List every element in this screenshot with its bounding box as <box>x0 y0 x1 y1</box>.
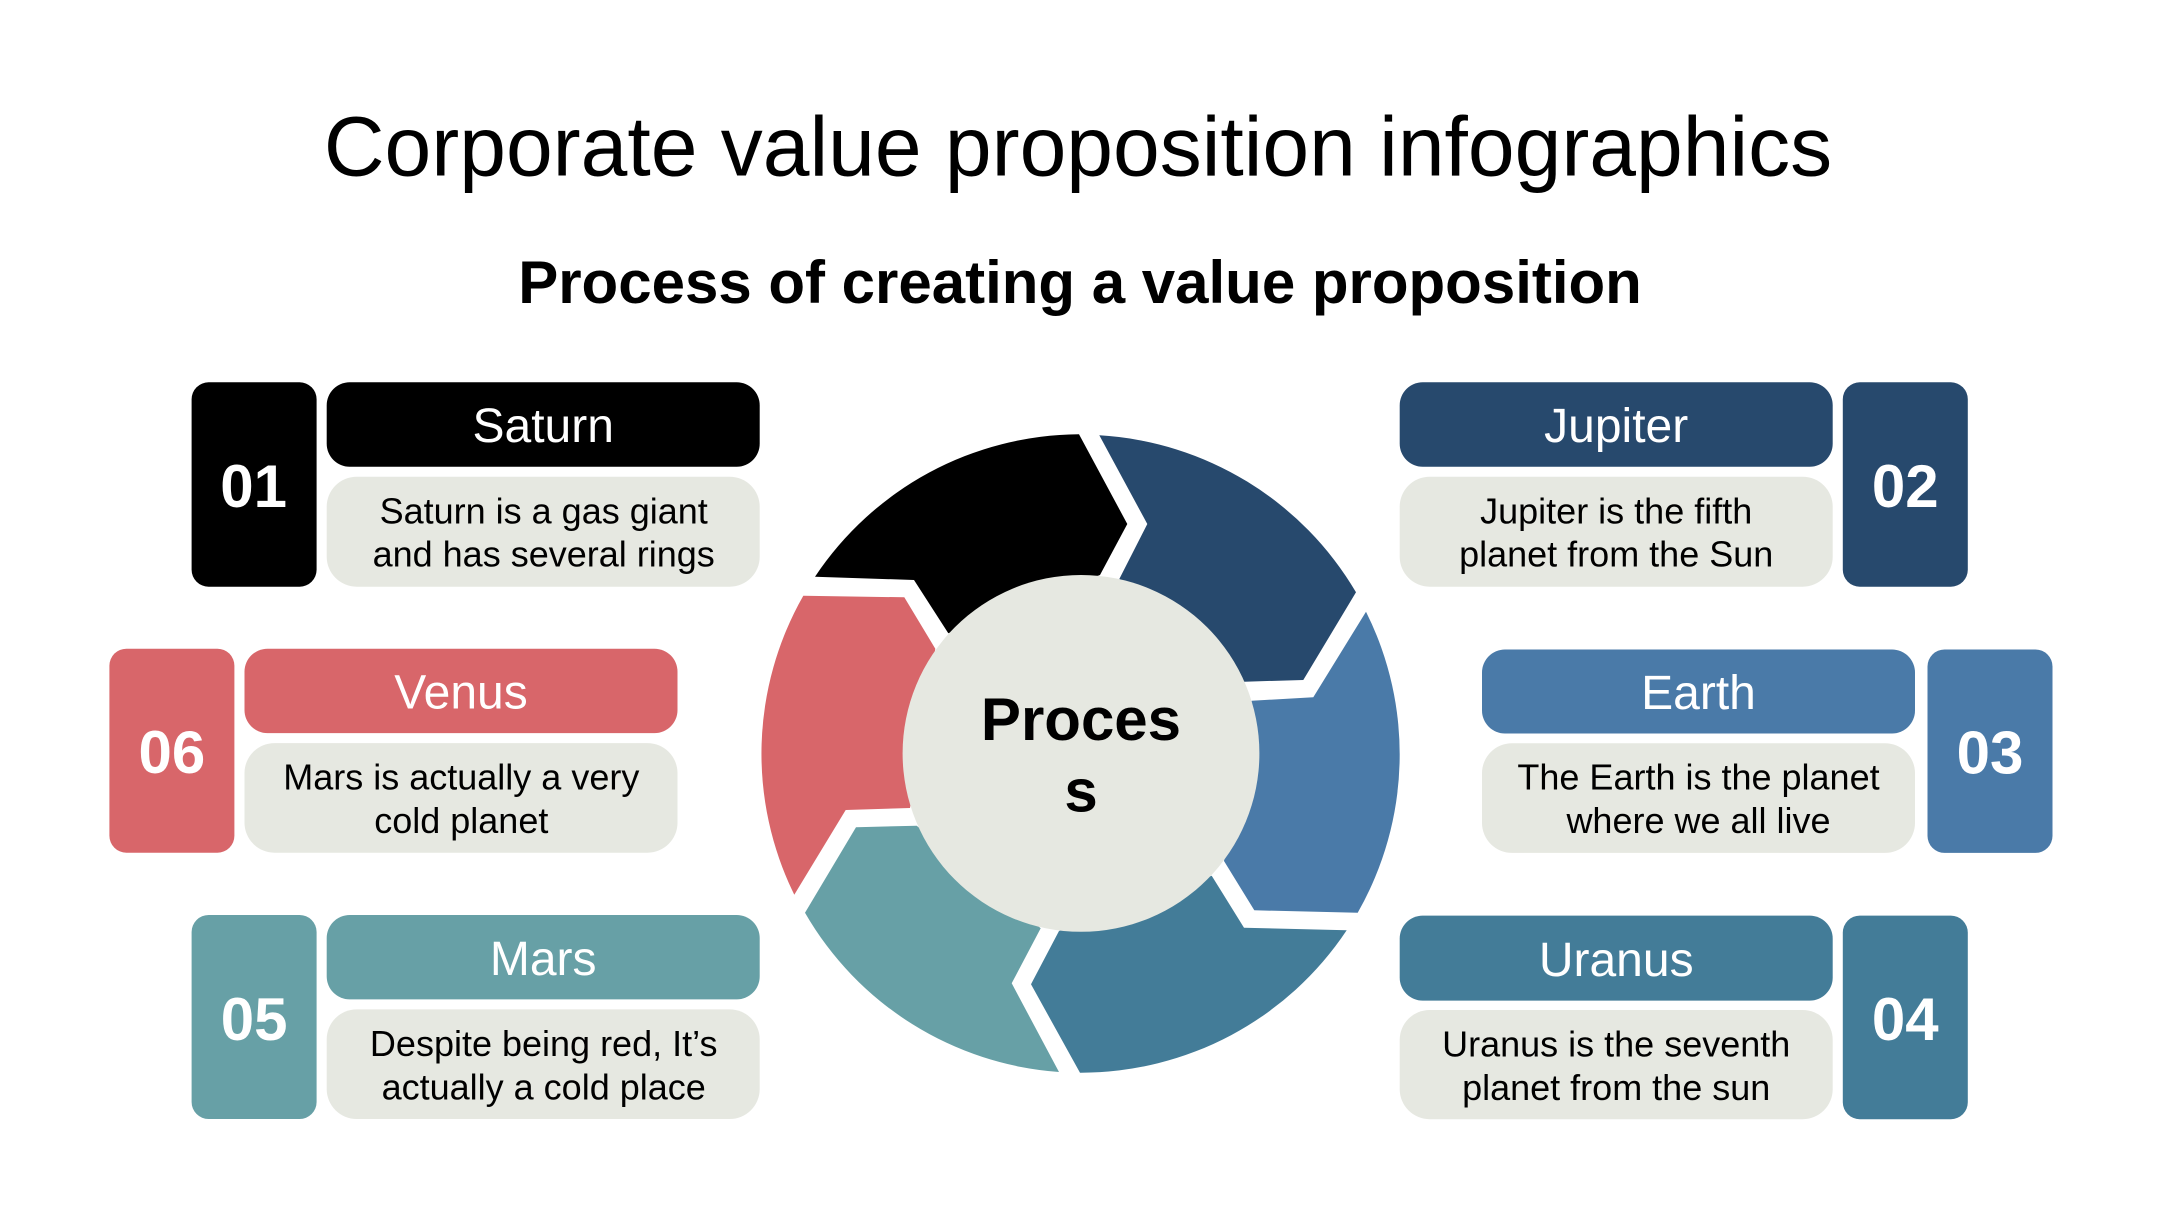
description Venus: Mars is actually a very <box>283 757 639 798</box>
number badge 04 <box>1843 916 1968 1119</box>
number badge 06 <box>109 649 234 853</box>
panel: 05 Mars <box>192 915 760 1119</box>
subtitle: Process of creating a value proposition <box>518 249 1642 316</box>
number badge 05: 05 <box>221 986 287 1053</box>
header Venus <box>244 649 678 733</box>
header Saturn <box>327 382 760 467</box>
panel: 03 Earth <box>1482 650 2052 853</box>
header Mars <box>327 915 760 999</box>
description Uranus: Uranus is the seventh <box>1442 1024 1790 1065</box>
description Earth <box>1482 743 1915 853</box>
description Saturn <box>327 477 760 587</box>
center circle with label <box>903 575 1259 932</box>
number badge 03: 03 <box>1957 720 2023 787</box>
number badge 03 <box>1928 650 2052 853</box>
header Earth: Earth <box>1641 667 1756 720</box>
panel: 04 Uranus <box>1400 916 1968 1119</box>
description Saturn: and has several rings <box>373 534 715 575</box>
description Earth: where we all live <box>1565 800 1831 841</box>
header Earth <box>1482 650 1915 734</box>
header Jupiter: Jupiter <box>1544 400 1688 453</box>
title: Corporate value proposition infographics <box>324 100 1832 194</box>
number badge 01: 01 <box>220 453 287 520</box>
panel: 02 Jupiter <box>1400 382 1968 587</box>
description Venus: cold planet <box>374 800 548 841</box>
number badge 05 <box>192 915 317 1119</box>
segment 05: Mars <box>805 826 1059 1072</box>
segment 06: Venus <box>761 596 935 895</box>
header Saturn: Saturn <box>472 400 614 453</box>
header Jupiter <box>1400 382 1833 467</box>
panel: 06 Venus <box>109 649 677 853</box>
description Mars <box>327 1009 760 1119</box>
description Uranus: planet from the sun <box>1462 1067 1770 1108</box>
segment 04: Uranus <box>1031 876 1347 1073</box>
description Jupiter: Jupiter is the fifth <box>1480 490 1752 531</box>
description Venus <box>244 743 678 853</box>
header Uranus <box>1400 916 1833 1001</box>
description Jupiter <box>1400 477 1833 587</box>
segment 01: Saturn <box>815 434 1127 633</box>
header Venus: Venus <box>394 666 528 719</box>
number badge 01 <box>192 382 317 587</box>
number badge 02: 02 <box>1872 453 1939 520</box>
number badge 02 <box>1843 382 1968 587</box>
header Mars: Mars <box>490 933 597 986</box>
description Uranus <box>1400 1010 1833 1119</box>
description Mars: actually a cold place <box>382 1066 706 1107</box>
segment 02: Jupiter <box>1099 435 1356 682</box>
cycle diagram <box>761 434 1400 1073</box>
number badge 06: 06 <box>139 719 205 786</box>
panel: 01 Saturn <box>192 382 760 587</box>
center circle with label: s <box>1064 758 1098 824</box>
description Jupiter: planet from the Sun <box>1459 534 1773 575</box>
segment 03: Earth <box>1224 612 1400 913</box>
number badge 04: 04 <box>1872 986 1939 1053</box>
description Earth: The Earth is the planet <box>1517 757 1880 798</box>
header Uranus: Uranus <box>1539 934 1694 987</box>
center circle with label: Proces <box>981 686 1181 753</box>
description Mars: Despite being red, It’s <box>370 1023 717 1064</box>
description Saturn: Saturn is a gas giant <box>380 490 708 531</box>
